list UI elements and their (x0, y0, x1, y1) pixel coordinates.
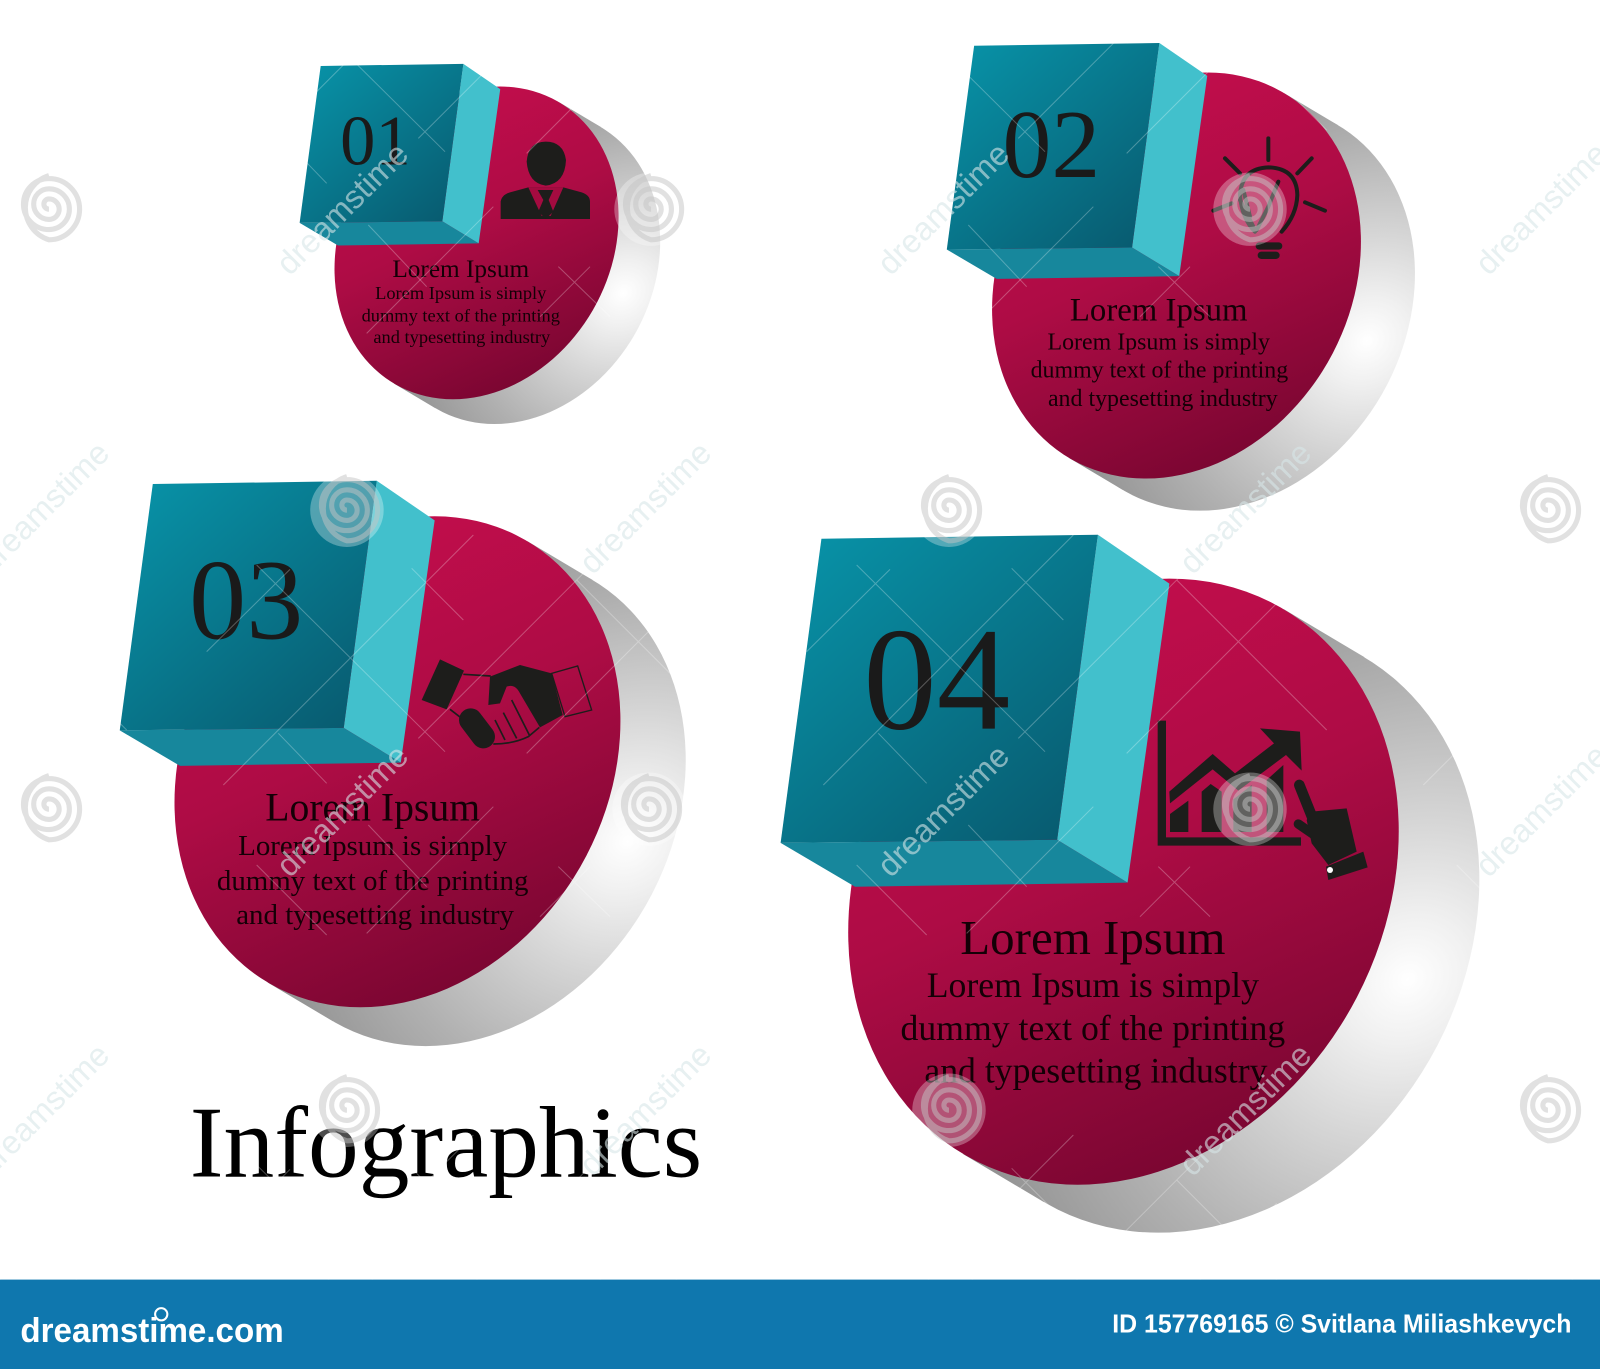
watermark overlay: dreamstime (1172, 434, 1318, 581)
unit 04 (781, 535, 1524, 1233)
unit 01 (300, 64, 683, 424)
unit 04 body: Lorem Ipsum (960, 910, 1225, 965)
unit 02 (947, 43, 1445, 511)
unit 02 body: Lorem Ipsum is simply (1047, 329, 1270, 355)
unit 03 body: Lorem Ipsum is simply (238, 830, 508, 862)
watermark overlay: dreamstime (870, 135, 1016, 282)
unit 03 body: Lorem Ipsum (265, 785, 480, 829)
watermark overlay (0, 135, 1600, 1183)
unit 04 body (781, 535, 1524, 1233)
unit 01 body: Lorem Ipsum (392, 255, 530, 283)
unit 04 body: and typesetting industry (924, 1051, 1268, 1091)
unit 01 body: and typesetting industry (373, 327, 551, 347)
footer logo: dreamstime.com (20, 1312, 284, 1350)
watermark overlay: dreamstime (1172, 1036, 1318, 1183)
icon: handshake (422, 659, 592, 744)
watermark overlay: dreamstime (572, 434, 718, 581)
unit 02 body: 02 (1003, 91, 1100, 199)
unit 03 body: 03 (189, 537, 303, 664)
unit 01 body: Lorem Ipsum is simply (375, 283, 547, 303)
unit 02 body (947, 43, 1445, 511)
watermark overlay: dreamstime (269, 135, 415, 282)
icon: light bulb (1213, 138, 1325, 255)
unit 01 body: dummy text of the printing (362, 305, 560, 325)
footer credit: ID 157769165 © Svitlana Miliashkevych (1112, 1311, 1571, 1339)
unit 04 body: 04 (863, 598, 1010, 761)
unit 03 (120, 481, 722, 1046)
unit 03 body: and typesetting industry (236, 899, 515, 931)
watermark overlay: dreamstime (870, 737, 1016, 884)
unit 01 body: 01 (340, 102, 411, 180)
unit 02 body: Lorem Ipsum (1070, 293, 1248, 329)
watermark overlay: dreamstime (572, 1036, 718, 1183)
unit 03 body (120, 481, 722, 1046)
unit 01 body (300, 64, 683, 424)
title: Infographics (190, 1087, 702, 1199)
footer banner (0, 1280, 1600, 1369)
unit 04 body: Lorem Ipsum is simply (927, 965, 1259, 1005)
unit 02 body: and typesetting industry (1048, 386, 1278, 412)
unit 03 body: dummy text of the printing (217, 865, 528, 897)
unit 04 body: dummy text of the printing (900, 1008, 1285, 1048)
icon: rising chart with pointing hand (1158, 721, 1368, 880)
watermark overlay: dreamstime (269, 737, 415, 884)
unit 02 body: dummy text of the printing (1031, 357, 1288, 383)
icon: businessman (501, 142, 590, 219)
